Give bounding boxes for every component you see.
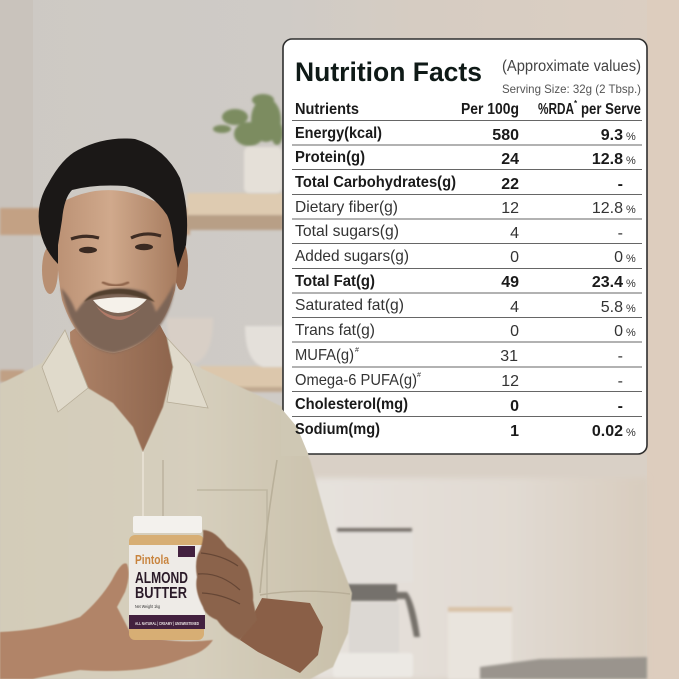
lower room backdrop [283, 455, 647, 679]
row: mufa [295, 347, 623, 365]
row: protein: 24 [501, 151, 519, 168]
row: energy: 9.3 [601, 127, 623, 144]
row: dietary fiber [295, 199, 636, 217]
row: mufa: 31 [500, 348, 518, 365]
row: total fat: Total Fat(g) [295, 273, 375, 290]
row: total fat: 23.4 [592, 274, 623, 291]
table header: Nutrients [295, 101, 359, 118]
row: mufa: # [355, 347, 359, 354]
row: sodium: 0.02 [592, 423, 623, 440]
row: energy: Energy(kcal) [295, 125, 382, 142]
plant in pot [213, 94, 283, 193]
row: omega-6 pufa: # [417, 372, 421, 379]
row: saturated fat [295, 297, 636, 316]
row: omega-6 pufa [295, 372, 623, 390]
row: saturated fat: 5.8 [601, 299, 623, 316]
row: energy [295, 125, 636, 144]
row: dietary fiber: 12 [501, 200, 519, 217]
beard stubble [61, 282, 175, 353]
row: total sugars: 4 [510, 225, 519, 242]
table header: per Serve [581, 101, 641, 118]
jar band [129, 615, 205, 629]
row: energy: 580 [492, 127, 519, 144]
jar [129, 516, 205, 640]
left forearm and hand [0, 563, 213, 679]
row: sodium: 1 [510, 423, 519, 440]
row: dietary fiber: 12.8 [592, 200, 623, 217]
row: sodium: % [626, 427, 636, 439]
row: protein: % [626, 155, 636, 167]
ears [42, 246, 58, 294]
row: total fat [295, 273, 636, 291]
collars [42, 330, 88, 412]
row: cholesterol: Cholesterol(mg) [295, 396, 408, 413]
row: sodium: Sodium(mg) [295, 421, 380, 438]
row: mufa: - [618, 348, 623, 365]
man [0, 138, 352, 679]
canister [448, 607, 512, 679]
stove [480, 657, 647, 679]
finger tips and gaps [198, 553, 240, 604]
row: added sugars: 0 [510, 249, 519, 266]
row: trans fat: 0 [510, 323, 519, 340]
row: trans fat: % [626, 327, 636, 339]
serving size: Serving Size: 32g (2 Tbsp.) [502, 82, 641, 96]
eyebrows [71, 234, 161, 239]
table header: * [574, 99, 578, 108]
teeth [93, 297, 147, 313]
row: total sugars: Total sugars(g) [295, 223, 399, 240]
lower wooden shelf [0, 366, 283, 392]
row: cholesterol: - [618, 398, 623, 415]
row: added sugars: 0 [614, 249, 623, 266]
row: trans fat: Trans fat(g) [295, 322, 375, 339]
table header [295, 99, 641, 118]
badge [178, 546, 195, 557]
row: omega-6 pufa: - [618, 373, 623, 390]
row: protein [295, 149, 636, 168]
jar body [129, 535, 204, 640]
moustache [84, 289, 155, 302]
row: cholesterol: 0 [510, 398, 519, 415]
row: energy: % [626, 131, 636, 143]
row: dietary fiber: % [626, 204, 636, 216]
neck [70, 325, 176, 452]
row: dietary fiber: Dietary fiber(g) [295, 199, 398, 216]
row: added sugars: Added sugars(g) [295, 248, 409, 265]
row: total carbohydrates: - [618, 176, 623, 193]
row: total fat: % [626, 278, 636, 290]
row: added sugars: % [626, 253, 636, 265]
table header: Per 100g [461, 101, 519, 118]
approximate values note: (Approximate values) [502, 58, 641, 75]
band text: ALL NATURAL | CREAMY | UNSWEETENED [135, 621, 200, 626]
row: saturated fat: Saturated fat(g) [295, 297, 404, 314]
right forearm [240, 598, 323, 673]
table header: %RDA [538, 101, 574, 118]
row: total carbohydrates: Total Carbohydrates(g) [295, 174, 456, 191]
row: omega-6 pufa: 12 [501, 373, 519, 390]
brand: Pintola [135, 552, 170, 567]
row: saturated fat: 4 [510, 299, 519, 316]
face [56, 190, 177, 353]
row: omega-6 pufa: Omega-6 PUFA(g) [295, 372, 417, 389]
row: added sugars [295, 248, 636, 266]
row: total carbohydrates [295, 174, 623, 193]
product name: ALMOND [135, 570, 188, 587]
row: cholesterol [295, 396, 623, 415]
row: total carbohydrates: 22 [501, 176, 519, 193]
row: mufa: MUFA(g) [295, 347, 354, 364]
row: protein: 12.8 [592, 151, 623, 168]
upper wooden shelf [0, 193, 283, 235]
row: protein: Protein(g) [295, 149, 365, 166]
blender [333, 528, 420, 677]
net weight: Net Weight 1kg [135, 604, 160, 609]
row: total sugars [295, 223, 623, 242]
shirt [0, 330, 352, 679]
jar label [129, 545, 205, 615]
product name line 2: BUTTER [135, 585, 187, 602]
row: sodium [295, 421, 636, 440]
row: total fat: 49 [501, 274, 519, 291]
row: trans fat: 0 [614, 323, 623, 340]
panel: nutrition facts [281, 39, 647, 456]
jar lid [133, 516, 202, 533]
row lines [292, 120, 642, 416]
shirt placket and folds [143, 452, 350, 600]
shoulder overlapping panel corner [281, 408, 309, 456]
row: total sugars: - [618, 225, 623, 242]
right hand [196, 530, 257, 640]
title: Nutrition Facts [295, 57, 482, 87]
nose [102, 282, 129, 286]
row: trans fat [295, 322, 636, 340]
row: saturated fat: % [626, 303, 636, 315]
hair [39, 138, 187, 268]
lower lip [96, 304, 146, 320]
bowls on shelf [167, 318, 283, 367]
eyes [79, 244, 153, 253]
